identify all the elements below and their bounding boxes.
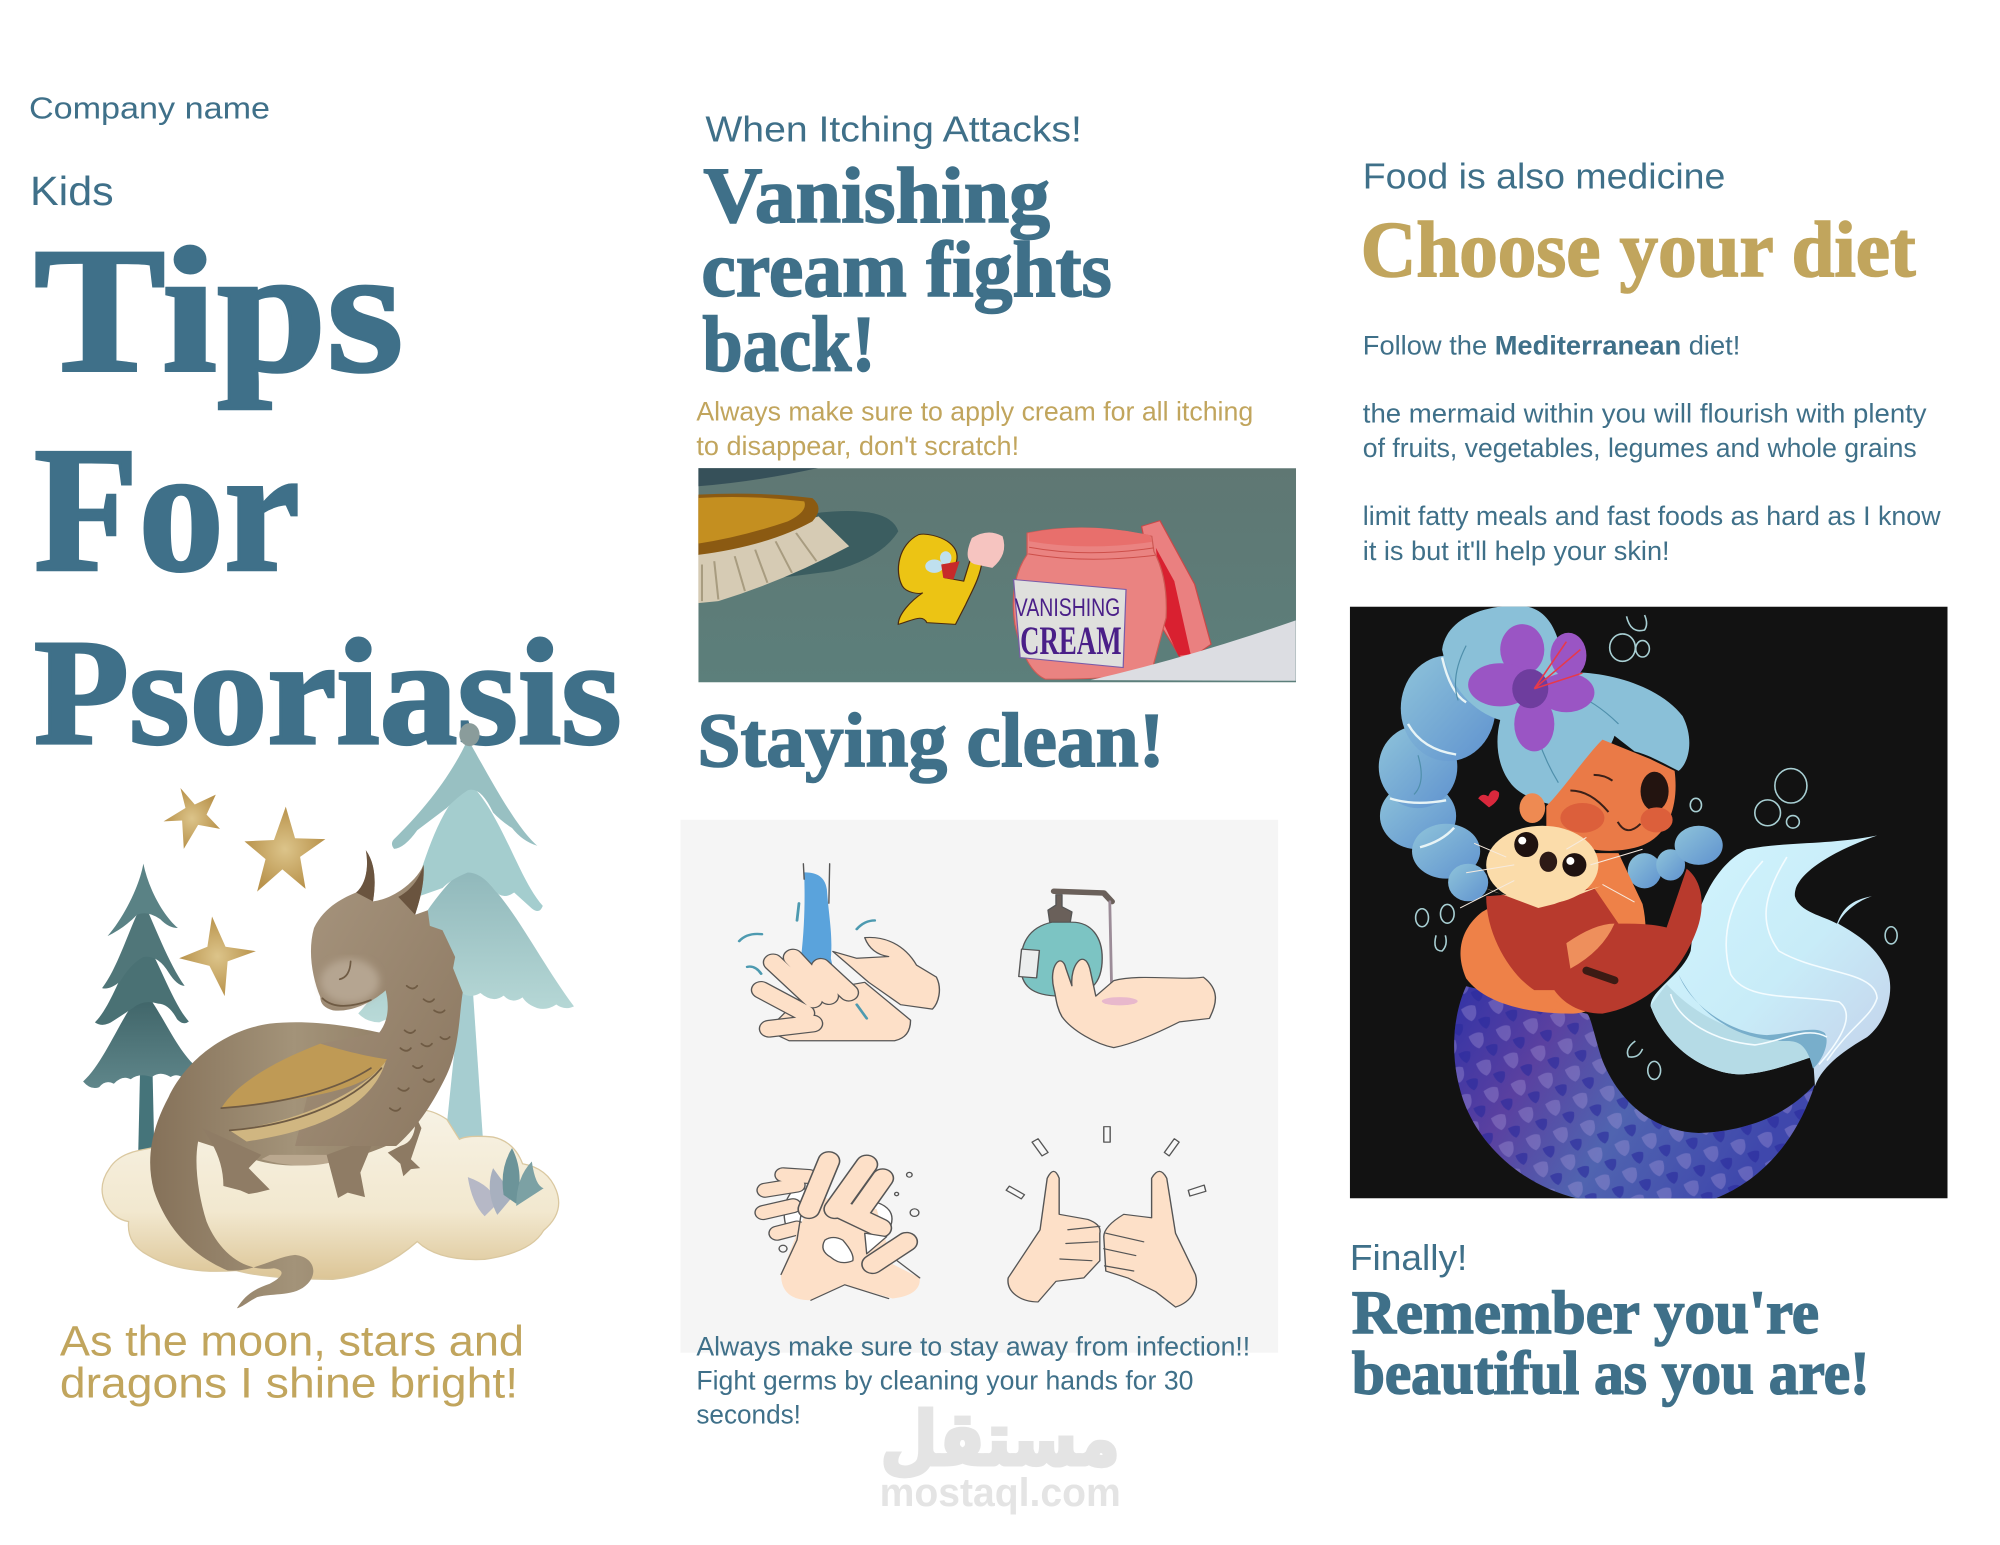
- cloth: [1090, 620, 1296, 681]
- mermaid body: [1460, 853, 1646, 1014]
- tail fin: [1651, 836, 1890, 1086]
- text: diet advice: limit fatty meals and fast foods as hard as I know: [1363, 501, 1941, 531]
- duckling: [898, 533, 1004, 624]
- mermaid face: [1519, 740, 1676, 851]
- step: thumbs up: [1006, 1127, 1206, 1307]
- heading: staying clean: Staying clean!: [697, 697, 1165, 783]
- main title: Tips: [34, 211, 404, 410]
- text: diet advice: [1363, 331, 1941, 566]
- image: vanishing cream cartoon: [695, 467, 1296, 682]
- heading: vanishing cream fights back: cream fights: [701, 226, 1112, 314]
- caption: moon stars dragons: [60, 1318, 524, 1408]
- gold stars: [164, 788, 325, 996]
- jar: CREAM: [1020, 619, 1122, 663]
- step: rinse under water: [739, 864, 939, 1041]
- image: mermaid hugging otter: [1350, 606, 1948, 1202]
- heading: vanishing cream fights back: Vanishing: [703, 152, 1050, 240]
- text: stay away from infection: [696, 1332, 1250, 1429]
- heading: food is also medicine: Food is also medicine: [1363, 156, 1725, 196]
- text: stay away from infection: Fight germs by cleaning your hands for 30: [696, 1366, 1193, 1396]
- text: apply cream: Always make sure to apply cream for all itching: [696, 396, 1253, 426]
- text: diet advice: Follow the Mediterranean diet!: [1363, 331, 1740, 361]
- heading: when itching attacks: When Itching Attacks!: [705, 109, 1082, 149]
- heading: remember you're beautiful: Remember you're: [1352, 1279, 1819, 1347]
- kids label: Kids: [30, 168, 114, 214]
- hair ties: [1390, 657, 1466, 847]
- step: lather hands: [763, 1161, 920, 1300]
- heading: remember you're beautiful: [1352, 1279, 1870, 1408]
- heading: remember you're beautiful: beautiful as you are!: [1352, 1340, 1870, 1408]
- panel: hand washing steps: [680, 820, 1278, 1353]
- jar: VANISHING: [1015, 594, 1120, 621]
- brush: [695, 494, 898, 603]
- main title: [34, 211, 622, 776]
- main title: Psoriasis: [34, 608, 622, 776]
- text: diet advice: the mermaid within you will flourish with plenty: [1363, 398, 1927, 428]
- bubbles: [1416, 615, 1897, 1079]
- main title: For: [34, 410, 300, 609]
- caption: moon stars dragons: As the moon, stars and: [60, 1318, 524, 1366]
- grass tuft: [468, 1148, 544, 1216]
- mermaid tail: [1454, 986, 1815, 1202]
- heading: finally: Finally!: [1350, 1238, 1467, 1278]
- watermark: mostaql: مستقل: [881, 1397, 1120, 1482]
- heading: choose your diet: Choose your diet: [1361, 206, 1916, 294]
- flower: [1468, 624, 1594, 751]
- hair: [1379, 606, 1723, 901]
- cloud: [102, 1110, 559, 1279]
- text: diet advice: of fruits, vegetables, legumes and whole grains: [1363, 433, 1917, 463]
- illustration: watercolor dragon on a cloud: [83, 723, 574, 1308]
- text: stay away from infection: seconds!: [696, 1399, 801, 1429]
- heading: vanishing cream fights back: back!: [702, 301, 876, 389]
- heading: vanishing cream fights back: [701, 152, 1112, 389]
- light pine tree: [358, 723, 574, 1153]
- text: stay away from infection: Always make sure to stay away from infection!!: [696, 1332, 1250, 1362]
- text: apply cream: [696, 396, 1253, 461]
- caption: moon stars dragons: dragons I shine bright!: [60, 1360, 518, 1408]
- jar: [1013, 521, 1211, 679]
- step: soap dispenser: [1019, 891, 1215, 1048]
- text: apply cream: to disappear, don't scratch!: [696, 431, 1019, 461]
- dragon: [150, 850, 463, 1308]
- watermark: mostaql: mostaql.com: [880, 1471, 1121, 1515]
- watermark: mostaql: [880, 1397, 1121, 1515]
- dark pine tree: [83, 864, 198, 1150]
- text: diet advice: it is but it'll help your skin!: [1363, 536, 1670, 566]
- heart: [1478, 790, 1499, 807]
- otter: [1460, 826, 1702, 1014]
- company name: Company name: [29, 91, 270, 126]
